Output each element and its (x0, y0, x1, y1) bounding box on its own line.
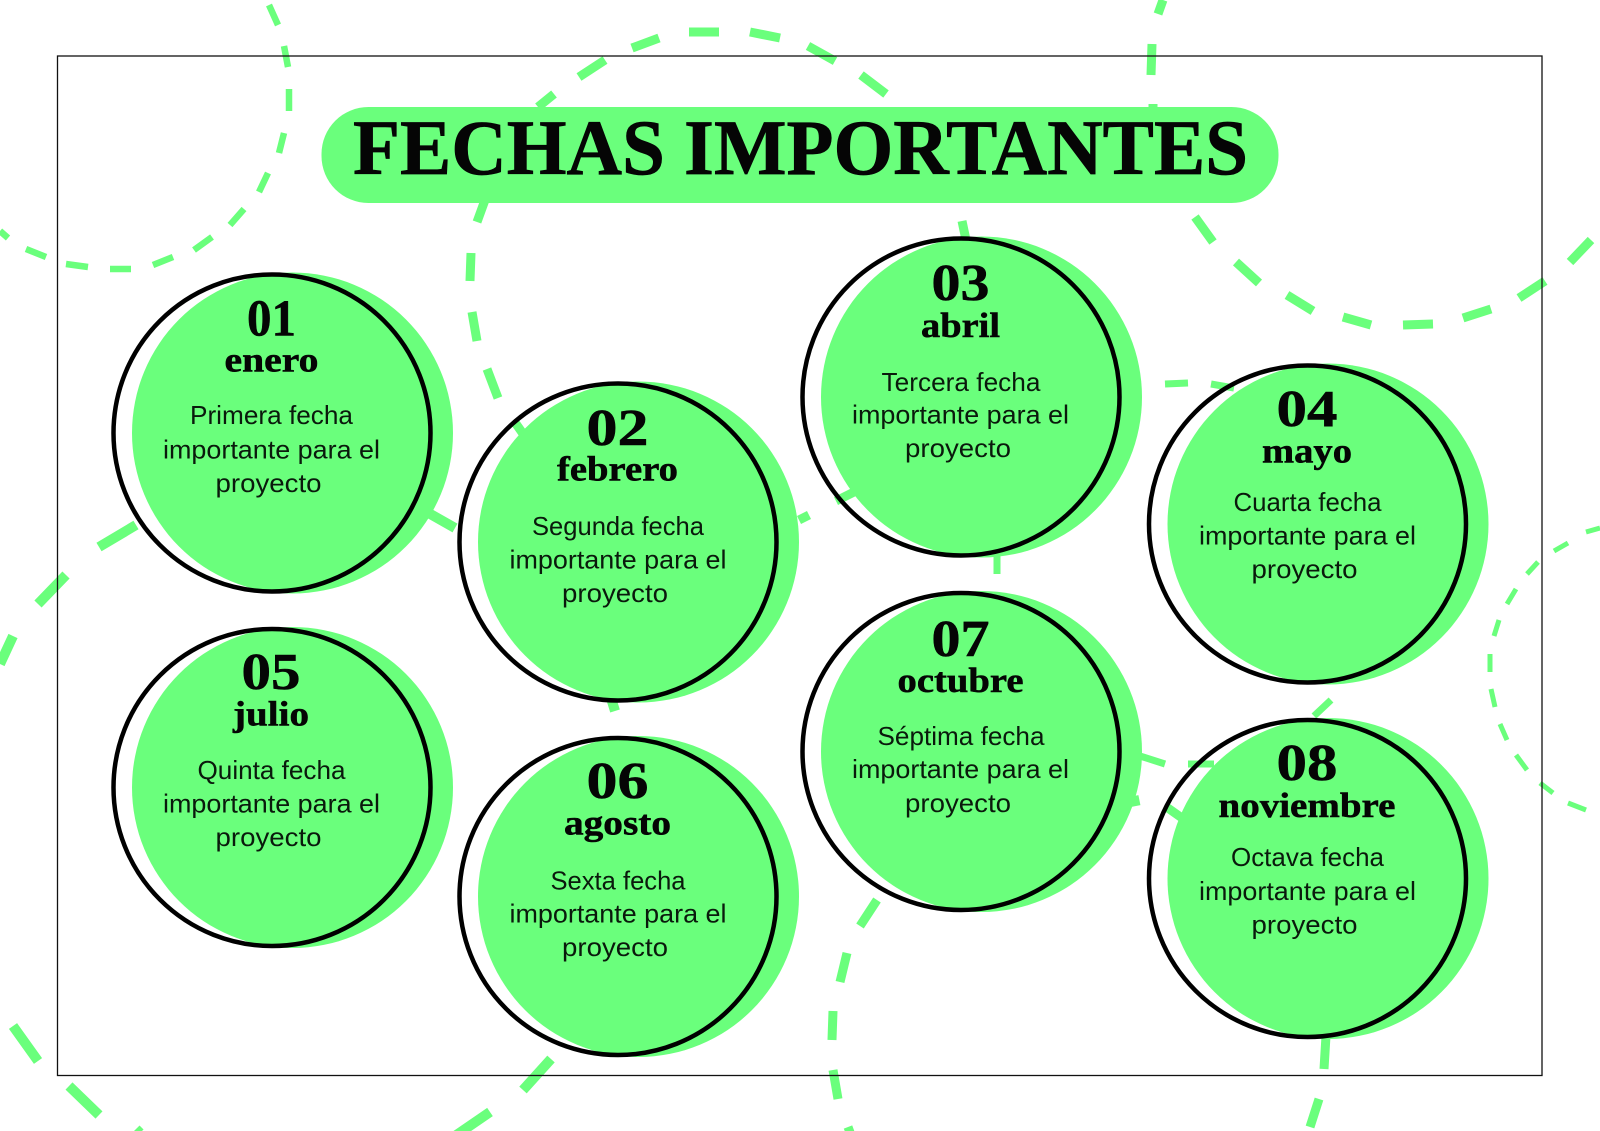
date circle 06 agosto: importante para el (510, 898, 726, 928)
date circle 01 enero: 01 (247, 290, 296, 348)
date circle 04 mayo: 04 (1276, 381, 1338, 438)
date circle 03 abril: abril (921, 306, 1000, 345)
date circle 03 abril: Tercera fecha (882, 367, 1041, 397)
date circle 08 noviembre: proyecto (1252, 910, 1358, 940)
dashed circle: top left (0, 5, 289, 269)
date circle 07 octubre: 07 (932, 611, 990, 668)
date circle 02 febrero: importante para el (510, 544, 726, 574)
date circle 02 febrero: proyecto (562, 578, 668, 608)
date circle 02 febrero: 02 (586, 400, 648, 457)
date circle 02 febrero: Segunda fecha (532, 511, 705, 541)
date circle 05 julio: Quinta fecha (198, 755, 346, 785)
date circle 01 enero: Primera fecha (190, 400, 354, 430)
date circle 05 julio: proyecto (216, 822, 322, 852)
date circle 07 octubre (802, 591, 1142, 912)
date circle 07 octubre: importante para el (852, 754, 1069, 784)
date circle 07 octubre: octubre (898, 661, 1024, 700)
dashed circle: top right (1151, 0, 1591, 325)
date circle 03 abril: 03 (932, 255, 990, 312)
title: FECHAS IMPORTANTES (353, 104, 1248, 191)
date circle 03 abril (802, 236, 1142, 558)
date circle 04 mayo: proyecto (1252, 554, 1358, 584)
date circle 08 noviembre: 08 (1276, 735, 1338, 792)
dashed circle: top centre (470, 32, 966, 520)
date circle 08 noviembre: importante para el (1199, 876, 1416, 906)
date circle 01 enero: importante para el (163, 434, 380, 464)
date circle 02 febrero (460, 382, 799, 702)
date circle 08 noviembre (1149, 718, 1488, 1039)
date circle 06 agosto: 06 (586, 753, 648, 810)
dashed circle: bottom centre right (832, 796, 1326, 1131)
date circle 04 mayo (1149, 364, 1488, 684)
date circle 06 agosto (460, 736, 799, 1057)
date circle 08 noviembre: noviembre (1218, 786, 1396, 825)
date circle 04 mayo: importante para el (1199, 520, 1416, 550)
date circle 02 febrero: febrero (557, 450, 678, 488)
date circle 01 enero (114, 272, 453, 594)
date circle 05 julio (114, 627, 453, 948)
date circle 06 agosto: proyecto (562, 932, 668, 962)
dashed circle: far right (1490, 528, 1600, 810)
date circle 06 agosto: Sexta fecha (550, 866, 686, 896)
date circle 08 noviembre: Octava fecha (1231, 842, 1385, 872)
date circle 04 mayo: mayo (1262, 432, 1352, 470)
dashed circle: middle right (997, 383, 1331, 764)
date circle 04 mayo: Cuarta fecha (1234, 487, 1382, 517)
date circle 01 enero: proyecto (216, 468, 322, 498)
date circle 01 enero: enero (224, 340, 318, 380)
date circle 06 agosto: agosto (564, 804, 671, 842)
date circle 05 julio: 05 (242, 644, 300, 701)
dashed circle: bottom left (0, 511, 615, 1131)
date circle 03 abril: proyecto (905, 433, 1011, 463)
date circle 07 octubre: proyecto (905, 788, 1011, 818)
date circle 05 julio: julio (232, 694, 309, 734)
date circle 05 julio: importante para el (163, 788, 380, 818)
date circle 03 abril: importante para el (852, 400, 1069, 430)
date circle 07 octubre: Séptima fecha (878, 721, 1045, 751)
